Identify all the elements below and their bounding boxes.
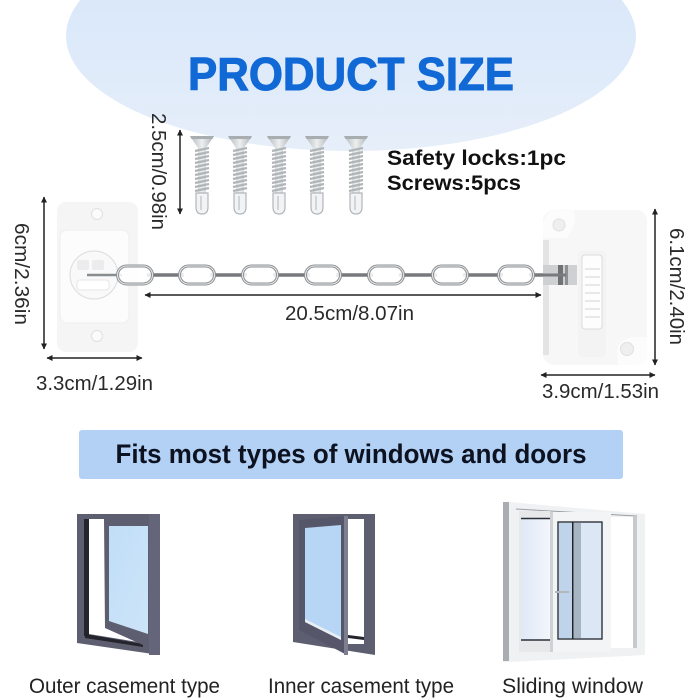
arrow: chain length [145, 294, 541, 296]
window: inner casement [293, 514, 375, 655]
label: lock width: 3.9cm/1.53in [542, 381, 659, 403]
screws [190, 136, 368, 214]
label: screw length: 2.5cm/0.98in [147, 113, 169, 230]
label: inner casement: Inner casement type [268, 675, 454, 698]
arrow: left plate height [43, 197, 45, 349]
label: outer casement: Outer casement type [29, 675, 220, 698]
window: sliding [503, 502, 645, 662]
package contents text: Safety locks:1pc [387, 147, 566, 170]
chain [118, 266, 560, 284]
package contents text [387, 147, 566, 195]
banner [79, 430, 623, 479]
arrow: lock width [541, 374, 655, 376]
label: chain length: 20.5cm/8.07in [285, 303, 414, 325]
arrow: left plate width [47, 357, 142, 359]
label: lock height: 6.1cm/2.40in [665, 228, 687, 345]
label: left plate height: 6cm/2.36in [10, 223, 32, 325]
arrow: lock height [654, 209, 656, 365]
right lock body [536, 209, 647, 365]
label: sliding window: Sliding window [502, 675, 644, 698]
left wall plate [57, 202, 138, 352]
background ellipse [66, 0, 636, 151]
title: PRODUCT SIZE [188, 48, 514, 100]
package contents text: Screws:5pcs [387, 172, 521, 195]
banner: Fits most types of windows and doors [116, 439, 586, 469]
label: left plate width: 3.3cm/1.29in [36, 373, 153, 395]
window: outer casement [77, 514, 160, 655]
arrow: screw length [179, 130, 181, 214]
